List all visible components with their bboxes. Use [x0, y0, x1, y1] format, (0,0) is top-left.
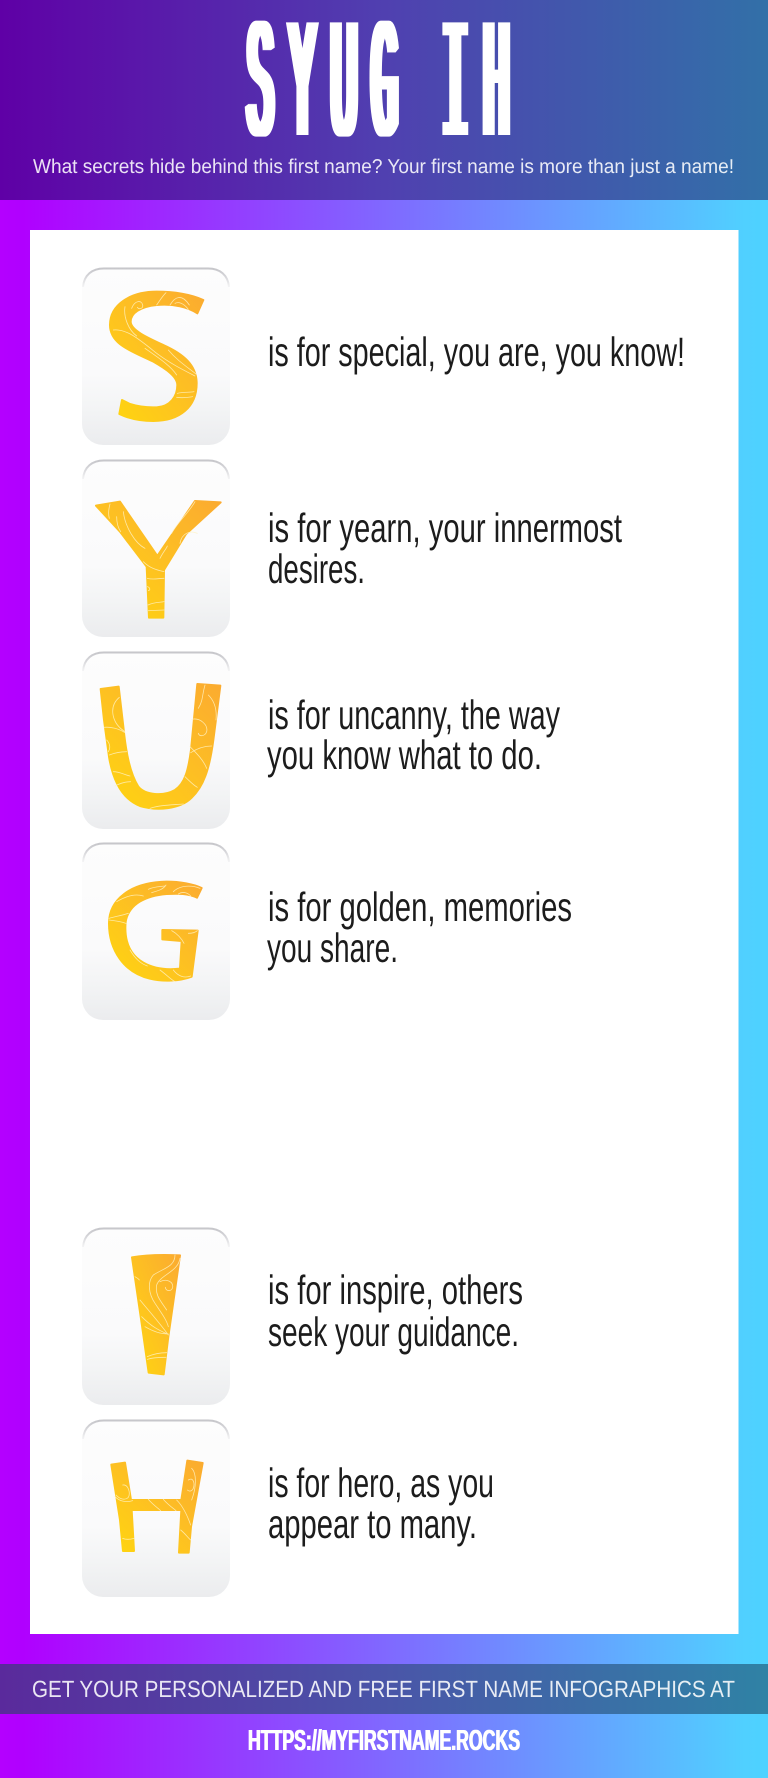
footer band — [0, 1664, 768, 1714]
icon: letter I tile — [82, 1227, 230, 1405]
icon: letter Y tile — [82, 459, 230, 637]
text: H: appear to many. — [268, 1501, 477, 1547]
text: I — [268, 1267, 523, 1355]
text: U — [267, 692, 560, 778]
row: S — [82, 267, 685, 445]
text: I: is for inspire, others — [268, 1267, 523, 1313]
text: Y — [268, 505, 622, 592]
text: G — [267, 884, 572, 971]
text: I: seek your guidance. — [268, 1309, 519, 1355]
text: U: you know what to do. — [267, 732, 542, 778]
text: H: is for hero, as you — [268, 1460, 494, 1506]
row: G — [82, 842, 572, 1020]
text: H — [268, 1460, 494, 1547]
subtitle: What secrets hide behind this first name? Your first name is more than just a name! — [33, 156, 734, 178]
row: H — [82, 1419, 494, 1597]
icon: letter H tile — [82, 1419, 230, 1597]
row: U — [82, 651, 560, 829]
icon: letter G tile — [82, 842, 230, 1020]
row: I — [82, 1227, 523, 1405]
icon: letter S tile — [82, 267, 230, 445]
header band — [0, 0, 768, 200]
row: Y — [82, 459, 622, 637]
text: Y: desires. — [268, 546, 365, 592]
white content panel — [30, 230, 738, 1634]
footer url: HTTPS://MYFIRSTNAME.ROCKS — [248, 1725, 520, 1757]
text: G: you share. — [267, 925, 398, 971]
text: U: is for uncanny, the way — [268, 692, 560, 738]
icon: letter U tile — [82, 651, 230, 829]
text: G: is for golden, memories — [268, 884, 572, 930]
text: Y: is for yearn, your innermost — [268, 505, 622, 551]
